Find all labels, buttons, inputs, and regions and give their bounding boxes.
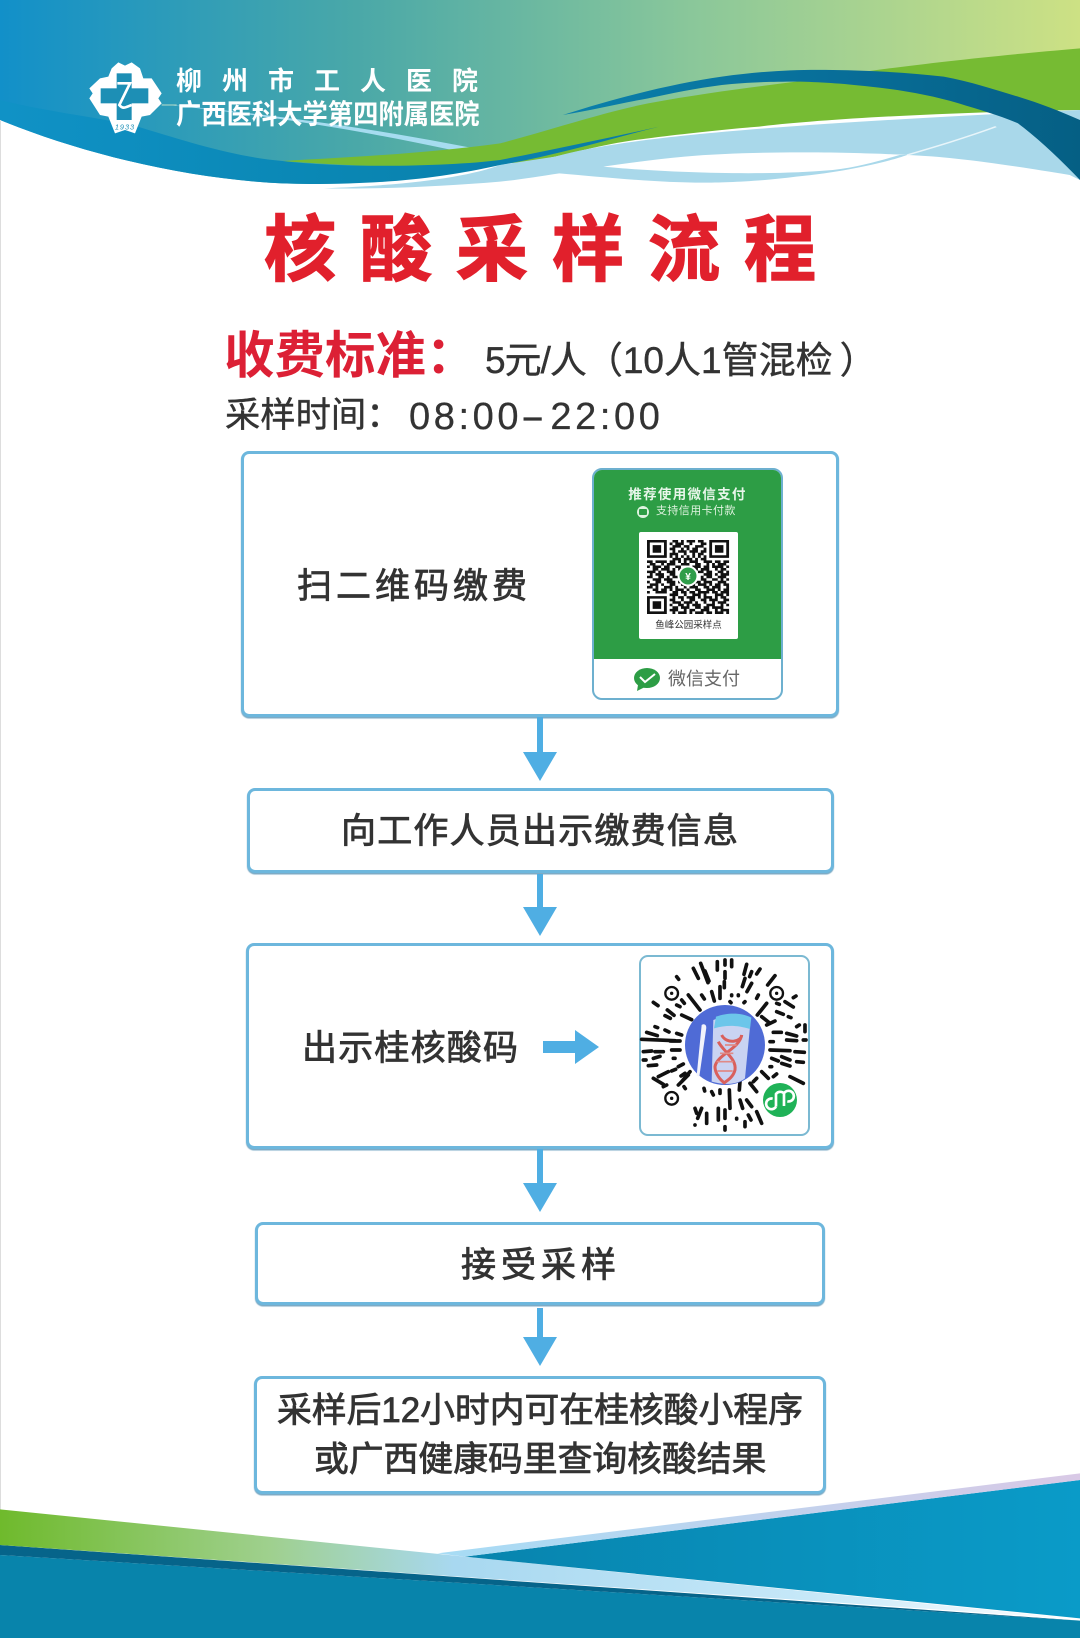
step 2 text: 向工作人员出示缴费信息 — [341, 812, 739, 851]
step 4 text: 接受采样 — [461, 1246, 621, 1285]
icon: WeChat Pay bubble — [634, 668, 660, 691]
step 5 line 1: 采样后12小时内可在桂核酸小程序 — [277, 1391, 803, 1430]
footer wave banner — [0, 1473, 1080, 1638]
step 3 panel — [246, 943, 834, 1149]
step 1 panel: scan to pay — [241, 451, 839, 717]
step 5 panel — [254, 1376, 826, 1494]
step 3 text: 出示桂核酸码 — [302, 1029, 519, 1068]
white QR panel — [639, 532, 738, 639]
QR code — [647, 540, 730, 614]
credit card note: 支持信用卡付款 — [656, 505, 736, 517]
QR code: ¥ — [685, 572, 691, 583]
header wave banner — [0, 0, 1080, 188]
sampling hours value: 08:00 22:00 — [409, 396, 663, 438]
QR location text: 鱼峰公园采样点 — [655, 620, 722, 631]
mini program code card — [639, 955, 810, 1136]
green card area — [594, 470, 781, 659]
hospital name line 2: 广西医科大学第四附属医院 — [176, 100, 480, 130]
WeChat Pay QR card — [592, 468, 783, 700]
hospital name line 1: 柳州市工人医院 — [176, 66, 498, 96]
WeChat Pay label: 微信支付 — [668, 669, 740, 689]
step 1 text: 扫二维码缴费 — [297, 567, 531, 606]
hospital logo — [89, 62, 177, 134]
sampling hours value: - — [521, 396, 552, 438]
title: 核酸采样流程 — [264, 211, 840, 291]
card heading: 推荐使用微信支付 — [628, 487, 747, 502]
fee standard value: 5元/人（10人1管混检） — [485, 340, 877, 381]
step 4 panel — [255, 1222, 825, 1305]
step 5 line 2: 或广西健康码里查询核酸结果 — [314, 1440, 766, 1479]
icon: credit card mark — [639, 509, 647, 515]
left edge line — [0, 120, 1, 1520]
sampling hours label: 采样时间： — [225, 396, 402, 435]
step 2 panel — [247, 788, 834, 873]
icon: credit card — [637, 506, 649, 518]
hospital logo: 1933 — [115, 123, 135, 132]
fee standard label: 收费标准： — [224, 327, 476, 384]
